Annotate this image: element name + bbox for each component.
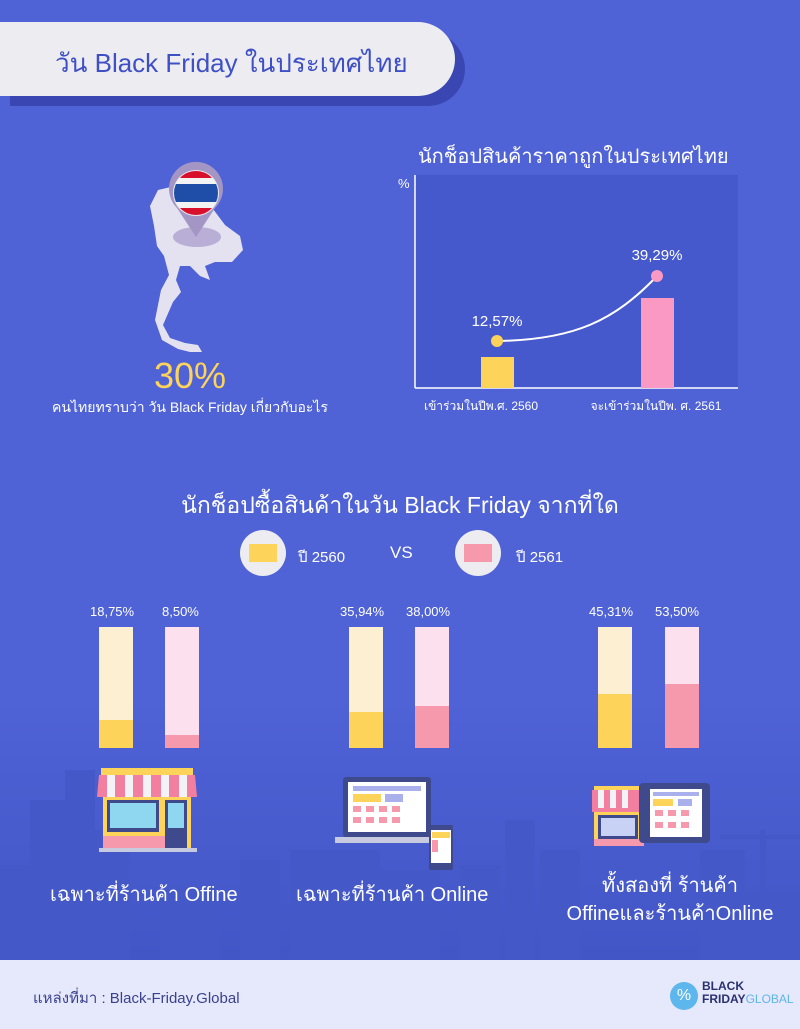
bar group: online: 35,94% xyxy=(340,604,384,619)
legend: VS xyxy=(390,543,413,562)
bar group: both: 45,31% xyxy=(589,604,633,619)
chart: 12,57% xyxy=(472,313,522,330)
footer xyxy=(0,960,800,1029)
chart xyxy=(398,175,738,413)
bar group: both xyxy=(589,604,699,748)
city silhouette background xyxy=(65,770,95,796)
bar group: online xyxy=(340,604,450,748)
bar group: offline: 18,75% xyxy=(90,604,134,619)
label: both: ทั้งสองที่ ร้านค้า xyxy=(602,875,738,897)
legend xyxy=(240,530,563,576)
logo: BLACK xyxy=(702,979,744,993)
line chart title: นักช็อปสินค้าราคาถูกในประเทศไทย xyxy=(418,146,729,168)
stat 30%: 30% xyxy=(154,355,226,396)
label: online: เฉพาะที่ร้านค้า Online xyxy=(296,884,488,906)
stat 30% xyxy=(52,355,328,415)
stat 30%: คนไทยทราบว่า วัน Black Friday เกี่ยวกับอะไร xyxy=(52,399,328,415)
bar group: offline: 8,50% xyxy=(162,604,199,619)
chart: จะเข้าร่วมในปีพ. ศ. 2561 xyxy=(591,399,722,413)
bar group: both: 53,50% xyxy=(655,604,699,619)
chart: 39,29% xyxy=(632,247,682,264)
logo: % xyxy=(677,987,691,1004)
footer: แหล่งที่มา : Black-Friday.Global xyxy=(33,990,240,1007)
chart: % xyxy=(398,176,410,191)
chart: เข้าร่วมในปีพ.ศ. 2560 xyxy=(424,399,538,413)
logo: FRIDAYGLOBAL xyxy=(702,992,794,1006)
legend: ปี 2561 xyxy=(516,549,563,566)
map of Thailand with flag pin xyxy=(150,162,243,352)
label: both: Offineและร้านค้าOnline xyxy=(567,903,773,925)
title banner xyxy=(0,22,465,106)
legend: ปี 2560 xyxy=(298,549,345,566)
label: both xyxy=(567,870,773,925)
bar group: online: 38,00% xyxy=(406,604,450,619)
icon: shop and tablet xyxy=(592,783,710,846)
title banner: วัน Black Friday ในประเทศไทย xyxy=(55,48,408,78)
logo xyxy=(670,979,794,1010)
bar group: offline xyxy=(90,604,199,748)
label: offline: เฉพาะที่ร้านค้า Offine xyxy=(50,884,238,906)
section title: นักช็อปซื้อสินค้าในวัน Black Friday จากที่ใด xyxy=(181,492,619,518)
icon: laptop and phone xyxy=(335,777,453,870)
icon: shop xyxy=(97,768,197,852)
